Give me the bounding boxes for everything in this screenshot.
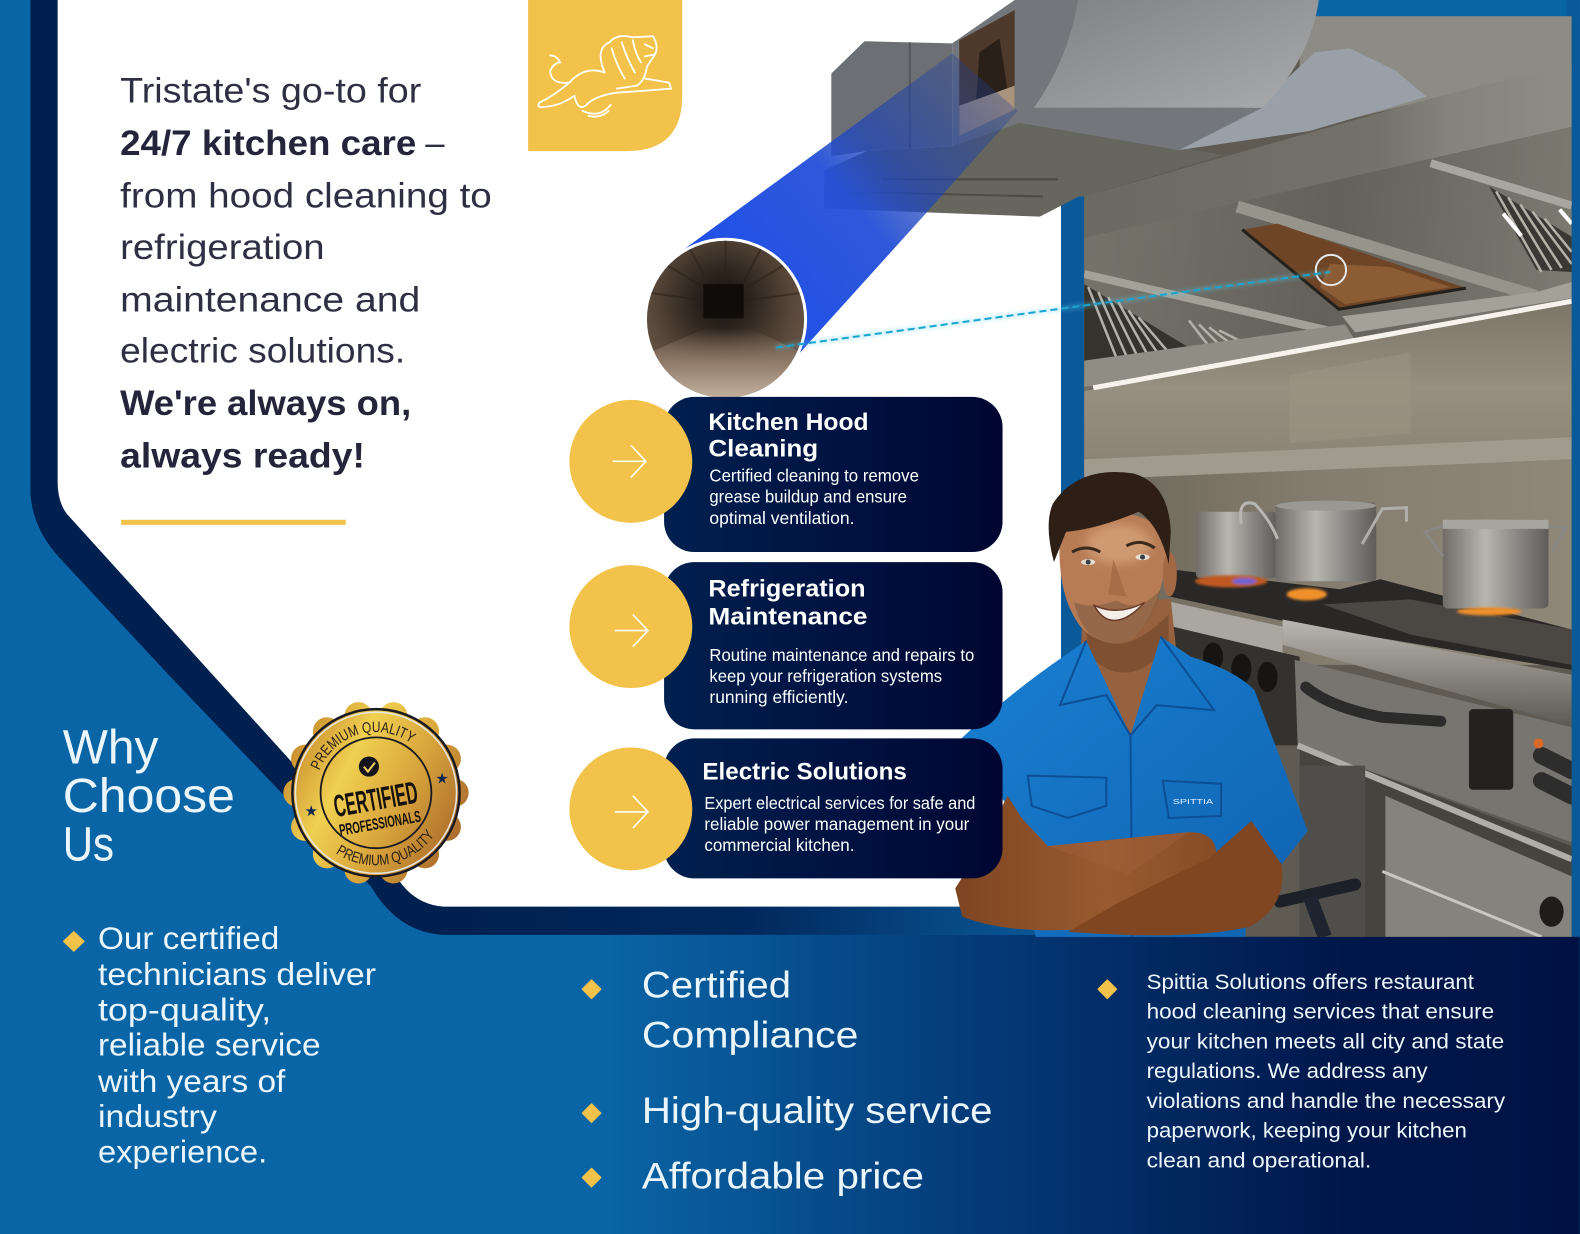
logo tab with lion [528, 0, 682, 151]
intro headline: always ready! [120, 436, 365, 475]
right compliance paragraph: your kitchen meets all city and state [1147, 1031, 1504, 1054]
certified professionals badge [283, 702, 469, 884]
service card: refrigeration maintenance [664, 562, 1003, 729]
smile [1094, 602, 1145, 620]
bullet: affordable price: Affordable price [642, 1155, 924, 1197]
service card: kitchen hood cleaning: Cleaning [708, 435, 818, 462]
icon: leaping lion [538, 36, 671, 117]
blue zoom beam [683, 53, 1018, 353]
bullet: certified compliance: Compliance [642, 1014, 858, 1056]
dashed pointer line [776, 272, 1330, 348]
intro headline: 24/7 kitchen care [120, 124, 416, 163]
service card: electric solutions: commercial kitchen. [704, 836, 854, 855]
stove grate [1169, 569, 1572, 670]
left duct box [831, 41, 952, 156]
dirty duct opening [959, 10, 1015, 136]
service card: refrigeration maintenance: running efficiently. [709, 688, 848, 707]
service card: refrigeration maintenance: keep your refrigeration systems [709, 667, 942, 686]
right compliance paragraph: paperwork, keeping your kitchen [1147, 1119, 1467, 1142]
intro headline: – [425, 124, 445, 163]
intro headline: maintenance and [120, 280, 420, 319]
eyes and brows [1072, 542, 1155, 565]
left bullet text: experience. [98, 1134, 267, 1169]
arrow circle 2 [569, 565, 692, 688]
hood filters [1084, 186, 1572, 375]
hood rails [1084, 163, 1572, 387]
lower duct tray [824, 120, 1223, 217]
arrow circle 3 [569, 747, 692, 870]
photo: commercial kitchen [1084, 16, 1572, 937]
galvanized duct section [1179, 48, 1427, 150]
circular close-up photo of duct interior [644, 238, 807, 403]
service card: electric solutions: Expert electrical services for safe and [704, 794, 975, 813]
kitchen shelf [1084, 437, 1572, 482]
service card: kitchen hood cleaning: optimal ventilation. [709, 509, 854, 528]
shirt logo: SPITTIA [1173, 799, 1214, 806]
face highlights [1086, 524, 1151, 564]
why choose us heading: Choose [63, 769, 235, 823]
back wall [1084, 459, 1572, 665]
shirt [959, 637, 1308, 937]
yellow divider [121, 520, 346, 525]
right blue frame strips [1061, 0, 1580, 937]
face [1059, 513, 1169, 643]
hood light strip [1093, 301, 1572, 388]
right compliance paragraph: regulations. We address any [1147, 1060, 1428, 1083]
why choose us heading: Us [63, 817, 114, 871]
lower stainless wall [1084, 302, 1572, 473]
certified professionals badge: PROFESSIONALS [338, 808, 422, 840]
certified professionals badge: PREMIUM QUALITY [336, 828, 432, 866]
hood underside [1084, 127, 1572, 391]
left bullet text: top-quality, [98, 992, 271, 1027]
check icon [359, 757, 379, 777]
right compliance paragraph [1147, 971, 1506, 1173]
kitchen upper wall [1300, 16, 1572, 118]
ears [1163, 552, 1177, 596]
bullet: high-quality service: High-quality service [642, 1089, 992, 1131]
oven control box [1469, 709, 1513, 790]
control knobs [1203, 643, 1278, 692]
right compliance paragraph: hood cleaning services that ensure [1147, 1000, 1494, 1023]
right compliance paragraph: clean and operational. [1147, 1150, 1371, 1173]
bottom gradient band [0, 935, 1580, 1234]
service card: electric solutions: reliable power management in your [704, 815, 970, 834]
service card: kitchen hood cleaning: Certified cleaning to remove [709, 467, 919, 486]
intro headline [120, 72, 492, 475]
crossed arms [955, 796, 1216, 930]
range front panel [1171, 602, 1283, 653]
intro headline: refrigeration [120, 228, 325, 267]
curved main duct [1034, 0, 1319, 108]
service card: kitchen hood cleaning: grease buildup and ensure [709, 488, 907, 507]
left bullet text: industry [98, 1099, 217, 1134]
bullet: certified compliance: Certified [642, 963, 791, 1005]
intro headline: from hood cleaning to [120, 177, 492, 216]
service card: refrigeration maintenance: Refrigeration [708, 575, 866, 602]
bullet: certified compliance [582, 963, 858, 1056]
technician portrait [955, 472, 1308, 937]
right compliance paragraph: violations and handle the necessary [1147, 1090, 1506, 1113]
pots [1196, 501, 1566, 608]
oven door [1295, 660, 1572, 842]
hair [1049, 472, 1171, 564]
ductwork [824, 0, 1427, 217]
left bullet text: Our certified [98, 921, 279, 956]
white main panel [58, 0, 1061, 907]
duct frame [952, 0, 1262, 150]
right bullet diamond [1098, 980, 1116, 998]
certified professionals badge: ★ [435, 771, 449, 788]
why choose us heading [63, 721, 235, 871]
burner flames [1195, 575, 1521, 615]
neck [1080, 599, 1177, 740]
why choose us heading: Why [63, 721, 159, 775]
navy frame of the white panel [30, 0, 1084, 935]
inspection ring [1316, 255, 1346, 285]
left bullet text [97, 921, 376, 1169]
intro headline: We're always on, [120, 384, 411, 423]
shirt collar and placket [1028, 637, 1221, 937]
arrow circle 1 [569, 400, 692, 523]
service card: electric solutions: Electric Solutions [702, 759, 907, 786]
intro headline: Tristate's go-to for [120, 72, 422, 111]
service card: refrigeration maintenance: Routine maintenance and repairs to [709, 646, 974, 665]
greasy hood panel [1242, 224, 1466, 309]
service card: refrigeration maintenance: Maintenance [708, 604, 868, 631]
lower drawers [1298, 745, 1572, 859]
intro headline: electric solutions. [120, 332, 405, 371]
hood front band [1084, 63, 1572, 238]
service card: kitchen hood cleaning: Kitchen Hood [708, 409, 869, 436]
service card: electric solutions [664, 738, 1003, 878]
right compliance paragraph: Spittia Solutions offers restaurant [1147, 971, 1474, 994]
left bullet diamond [64, 932, 84, 951]
certified professionals badge: CERTIFIED [331, 775, 420, 824]
certified professionals badge: ★ [304, 803, 318, 820]
certified professionals badge: PREMIUM QUALITY [310, 722, 416, 770]
stubble [1074, 589, 1161, 644]
service card: kitchen hood cleaning [664, 397, 1003, 552]
left bullet text: technicians deliver [98, 957, 376, 992]
oven handle [1306, 687, 1441, 721]
left bullet text: with years of [97, 1064, 286, 1099]
left bullet text: reliable service [98, 1028, 321, 1063]
